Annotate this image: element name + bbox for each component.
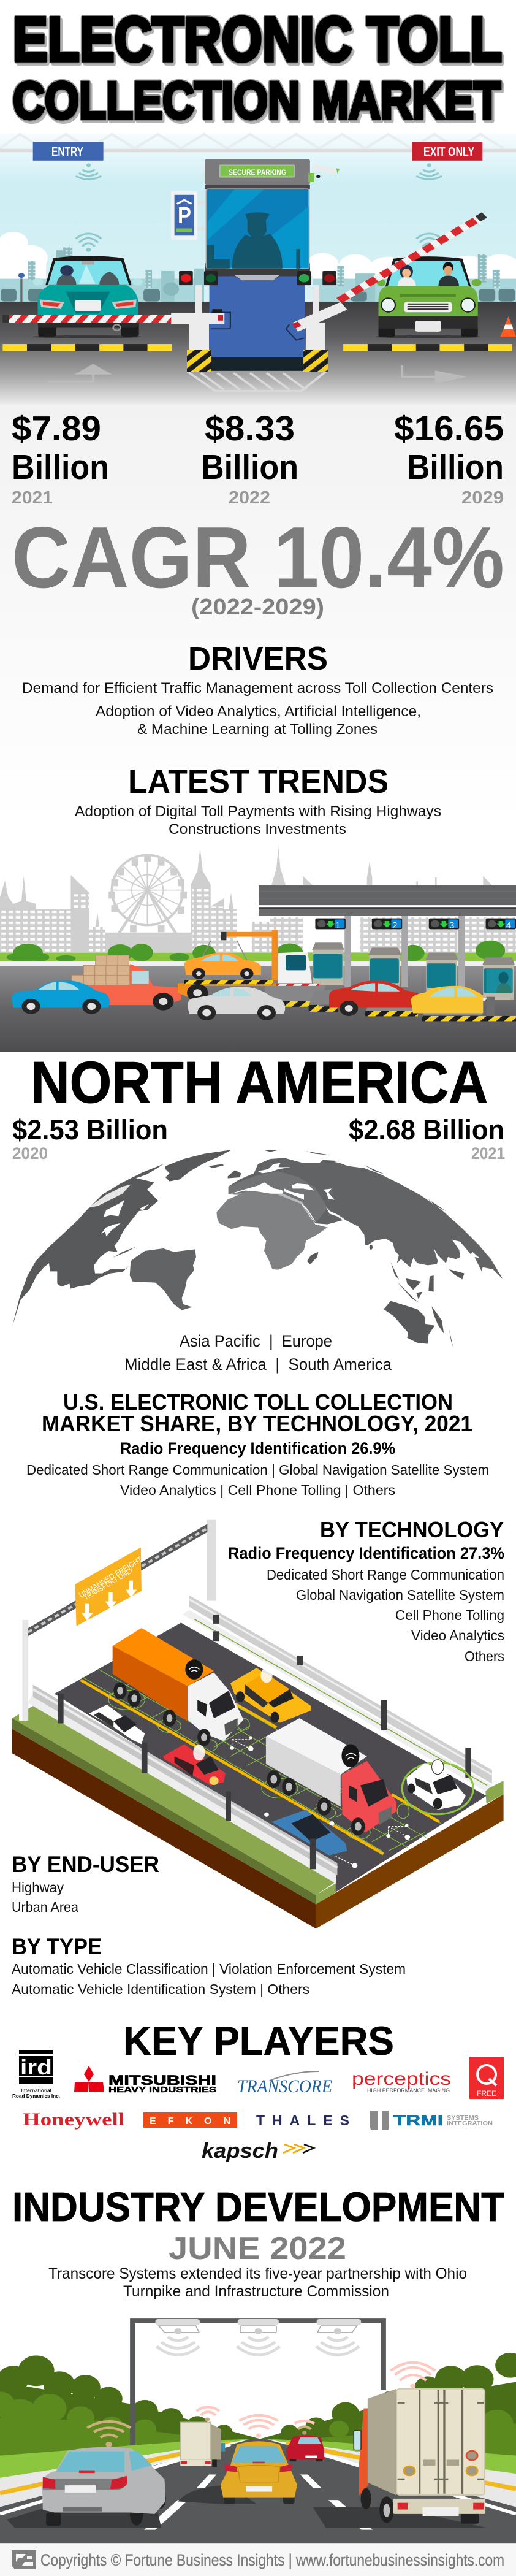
North America 2021 value — [349, 1114, 505, 1163]
silver car — [7, 2447, 166, 2528]
gantry signal arcs — [157, 2337, 359, 2355]
freight sign — [75, 1548, 142, 1626]
by type segment: Automatic Vehicle Classification | Violation Enforcement System — [12, 1961, 406, 1977]
hedge — [0, 941, 516, 962]
logo: IRD: International — [21, 2087, 51, 2093]
logo: Kapsch — [202, 2139, 314, 2163]
logo: Perceptics — [352, 2069, 451, 2093]
latest trends: Adoption of Digital Toll Payments with Rising Highways — [75, 803, 441, 820]
roadside — [0, 2439, 516, 2511]
booths — [312, 942, 515, 1000]
industry development: Transcore Systems extended its five-year partnership with Ohio — [48, 2265, 467, 2282]
parking P sign — [171, 191, 205, 240]
logo: IRD: ird — [20, 2056, 52, 2079]
CAGR: (2022-2029) — [191, 594, 324, 619]
drivers — [22, 640, 493, 738]
road — [0, 2439, 516, 2543]
ferris wheel — [105, 855, 192, 952]
lane numbers: 1 — [335, 920, 340, 931]
freight sign text: UNMANNED FREIGHT — [77, 1555, 144, 1600]
large truck — [313, 2389, 487, 2528]
title — [13, 4, 504, 132]
panel: highway tolling illustration — [0, 2319, 516, 2543]
logo: Efkon: EFKON — [150, 2116, 230, 2127]
cctv camera — [308, 164, 340, 182]
blue car — [271, 1810, 347, 1856]
wifi icons — [76, 163, 442, 252]
logo: Honeywell: Honeywell — [23, 2109, 124, 2130]
by technology segment: Radio Frequency Identification 27.3% — [228, 1544, 504, 1562]
road — [0, 961, 516, 1052]
by technology segment: Cell Phone Tolling — [395, 1607, 504, 1623]
lane numbers — [335, 920, 511, 931]
red car — [329, 980, 421, 1016]
lane gates — [265, 984, 516, 1021]
canopy — [259, 885, 516, 987]
drivers: DRIVERS — [188, 640, 328, 677]
logo: Perceptics: perceptics — [352, 2069, 451, 2089]
road markers — [2, 344, 512, 351]
logo: Mitsubishi — [74, 2066, 216, 2094]
toll booth — [2, 159, 484, 372]
orange truck — [113, 1628, 243, 1746]
logo: IRD — [12, 2050, 60, 2099]
heading: key players: KEY PLAYERS — [123, 2018, 394, 2063]
logo: TransCore: TRANSCORE — [237, 2076, 332, 2096]
far guard rail — [183, 1596, 492, 1791]
tow truck — [178, 930, 312, 1001]
logo: TRMI: TRMI — [393, 2112, 443, 2129]
by end-user segment: BY END-USER — [12, 1852, 159, 1877]
market size figure 2022: Billion — [201, 448, 298, 487]
logo: Thales: THALES — [256, 2112, 349, 2128]
market size figure 2029: 2029 — [461, 488, 504, 508]
exit label: EXIT ONLY — [423, 145, 475, 159]
U.S. market share heading — [26, 1389, 489, 1498]
freight sign text: TRANSPORT ONLY — [82, 1565, 135, 1602]
U.S. market share heading: Radio Frequency Identification 26.9% — [120, 1439, 395, 1458]
market size figure 2021: $7.89 — [12, 409, 101, 448]
by type segment: BY TYPE — [12, 1934, 102, 1959]
yellow taxi — [230, 1668, 311, 1723]
U.S. market share heading: MARKET SHARE, BY TECHNOLOGY, 2021 — [42, 1411, 472, 1436]
P letter: P — [178, 203, 191, 229]
North America 2021 value: 2021 — [471, 1144, 505, 1163]
by type segment — [12, 1934, 406, 1997]
gantry — [132, 2319, 384, 2447]
by end-user segment: Urban Area — [12, 1899, 78, 1915]
market size figure 2029: $16.65 — [394, 409, 504, 448]
North America 2020 value — [12, 1114, 168, 1163]
by technology segment: Global Navigation Satellite System — [296, 1587, 504, 1603]
industry development — [12, 2184, 504, 2300]
by technology segment: Others — [465, 1648, 504, 1664]
pickup with boxes — [72, 955, 181, 1011]
yellow car — [178, 2441, 297, 2504]
guard silhouette — [207, 212, 300, 269]
drivers: Demand for Efficient Traffic Management across Toll Collection Centers — [22, 680, 493, 697]
logo: Kapsch: kapsch — [202, 2139, 278, 2163]
exit sign — [412, 142, 482, 161]
market size figure 2022: $8.33 — [205, 409, 295, 448]
small box truck — [180, 2422, 225, 2467]
latest trends: Constructions Investments — [169, 821, 346, 838]
traffic cone — [500, 316, 516, 337]
road surface — [55, 1622, 487, 1892]
panel: toll booth hero illustration — [0, 134, 516, 405]
other regions list: Middle East & Africa | South America — [124, 1355, 392, 1374]
red car — [163, 1744, 226, 1785]
North America 2020 value: 2020 — [12, 1144, 48, 1163]
U.S. market share heading: U.S. ELECTRONIC TOLL COLLECTION — [63, 1389, 453, 1415]
red car — [286, 2435, 324, 2461]
white car — [188, 987, 285, 1020]
white car left — [89, 1705, 145, 1744]
panel: toll plaza traffic illustration — [0, 846, 516, 1052]
right car — [375, 256, 482, 338]
logo: Perceptics: HIGH PERFORMANCE IMAGING — [367, 2087, 450, 2093]
by technology segment: Video Analytics — [411, 1627, 504, 1643]
drivers: Adoption of Video Analytics, Artificial Intelligence, — [96, 703, 421, 720]
parking post — [18, 272, 25, 302]
parked cars silhouette — [1, 282, 515, 302]
soil block — [12, 1706, 504, 1928]
North America 2021 value: $2.68 Billion — [349, 1114, 504, 1145]
North America 2020 value: $2.53 Billion — [12, 1114, 168, 1145]
market size figure 2021: 2021 — [12, 488, 53, 508]
city skyline — [0, 846, 516, 952]
world map — [12, 1150, 503, 1347]
market size figure 2022 — [201, 409, 298, 508]
ground hatch — [188, 372, 326, 391]
yellow lane lines — [81, 1680, 439, 1854]
panel: isometric smart highway illustration — [12, 1520, 504, 1928]
clouds — [0, 232, 516, 283]
by technology segment: Dedicated Short Range Communication — [267, 1567, 504, 1583]
logo: TRMI: INTEGRATION — [447, 2120, 493, 2127]
market size figure 2021: Billion — [12, 448, 109, 487]
lane numbers: 4 — [506, 920, 511, 931]
ground arrows — [48, 365, 462, 383]
yellow car — [411, 986, 483, 1013]
by technology segment — [228, 1517, 504, 1664]
by end-user segment: Highway — [12, 1879, 64, 1895]
overhead gantry — [19, 1520, 216, 1721]
left barrier arm — [2, 309, 230, 329]
skyline — [0, 247, 516, 302]
logo: Q-Free — [469, 2057, 504, 2099]
footer — [0, 2543, 516, 2576]
entry sign — [33, 142, 104, 161]
by technology segment: BY TECHNOLOGY — [320, 1517, 504, 1542]
market size figure 2022: 2022 — [229, 488, 270, 508]
logo: Mitsubishi: HEAVY INDUSTRIES — [108, 2085, 216, 2094]
road surface — [0, 302, 516, 405]
secure parking label: SECURE PARKING — [229, 168, 286, 177]
sensor nodes — [230, 1737, 410, 1868]
overhead truss — [0, 134, 516, 152]
vehicle wifi signals — [87, 2363, 435, 2447]
logo: TRMI: SYSTEMS — [447, 2114, 479, 2122]
market size figure 2021 — [12, 409, 109, 508]
logo: Efkon — [143, 2112, 237, 2128]
U.S. market share heading: Video Analytics | Cell Phone Tolling | Others — [120, 1482, 395, 1498]
U.S. market share heading: Dedicated Short Range Communication | Global Navigation Satellite System — [26, 1462, 489, 1478]
by type segment: Automatic Vehicle Identification System | Others — [12, 1981, 309, 1997]
white box truck — [266, 1718, 396, 1835]
lane numbers: 2 — [392, 920, 397, 931]
other regions list: Asia Pacific | Europe — [180, 1332, 332, 1350]
latest trends: LATEST TRENDS — [128, 762, 389, 800]
market size figure 2029: Billion — [407, 448, 504, 487]
heading: North America: NORTH AMERICA — [31, 1050, 488, 1115]
lane numbers: 3 — [449, 920, 454, 931]
lane signals — [315, 919, 516, 929]
green sensor grid — [82, 1659, 441, 1851]
logo: TRMI — [370, 2111, 493, 2130]
barrier posts — [187, 285, 328, 372]
trees — [0, 2353, 516, 2463]
near guard rail — [28, 1684, 337, 1884]
industry development: JUNE 2022 — [169, 2231, 346, 2266]
signal lights — [179, 271, 336, 285]
industry development: Turnpike and Infrastructure Commission — [123, 2283, 389, 2300]
by end-user segment — [12, 1852, 159, 1915]
latest trends — [75, 762, 441, 838]
left car — [33, 256, 143, 338]
icon: Fortune Business Insights logo — [12, 2550, 36, 2569]
market size figure 2029 — [394, 409, 504, 508]
white car right — [402, 1760, 473, 1814]
logo: Q-Free: FREE — [477, 2089, 496, 2098]
other regions list — [124, 1332, 392, 1374]
logo: Mitsubishi: MITSUBISHI — [108, 2073, 216, 2088]
drivers: & Machine Learning at Tolling Zones — [137, 721, 378, 738]
entry label: ENTRY — [51, 145, 84, 159]
blue car — [12, 980, 110, 1014]
right barrier arm — [286, 215, 484, 340]
logo: IRD: Road Dynamics Inc. — [12, 2093, 60, 2099]
